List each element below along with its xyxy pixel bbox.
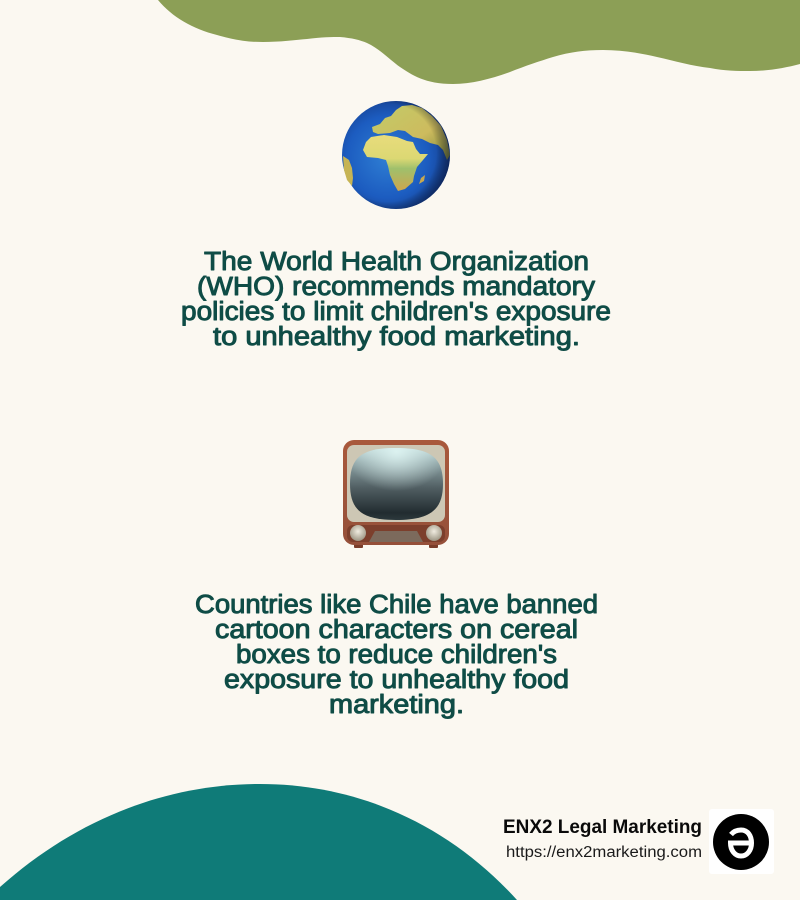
bottom teal arc bbox=[0, 784, 517, 900]
icon: television bbox=[343, 440, 449, 548]
brand name: ENX2 Legal Marketing bbox=[503, 817, 702, 838]
text block: Chile example bbox=[195, 591, 598, 719]
text block: Chile example: boxes to reduce children's bbox=[236, 641, 557, 669]
logo bbox=[709, 809, 774, 874]
icon: globe bbox=[342, 101, 450, 209]
text block: WHO recommendation: The World Health Organization bbox=[204, 248, 589, 276]
text block: WHO recommendation: (WHO) recommends mandatory bbox=[197, 273, 595, 301]
text block: WHO recommendation bbox=[181, 248, 611, 351]
text block: Chile example: cartoon characters on cereal bbox=[215, 616, 578, 644]
text block: Chile example: marketing. bbox=[329, 691, 464, 719]
top green wave bbox=[158, 0, 800, 84]
text block: WHO recommendation: policies to limit children's exposure bbox=[181, 298, 611, 326]
text block: WHO recommendation: to unhealthy food marketing. bbox=[213, 323, 580, 351]
brand url: https://enx2marketing.com bbox=[506, 844, 702, 861]
text block: Chile example: Countries like Chile have banned bbox=[195, 591, 598, 619]
text block: Chile example: exposure to unhealthy food bbox=[224, 666, 569, 694]
